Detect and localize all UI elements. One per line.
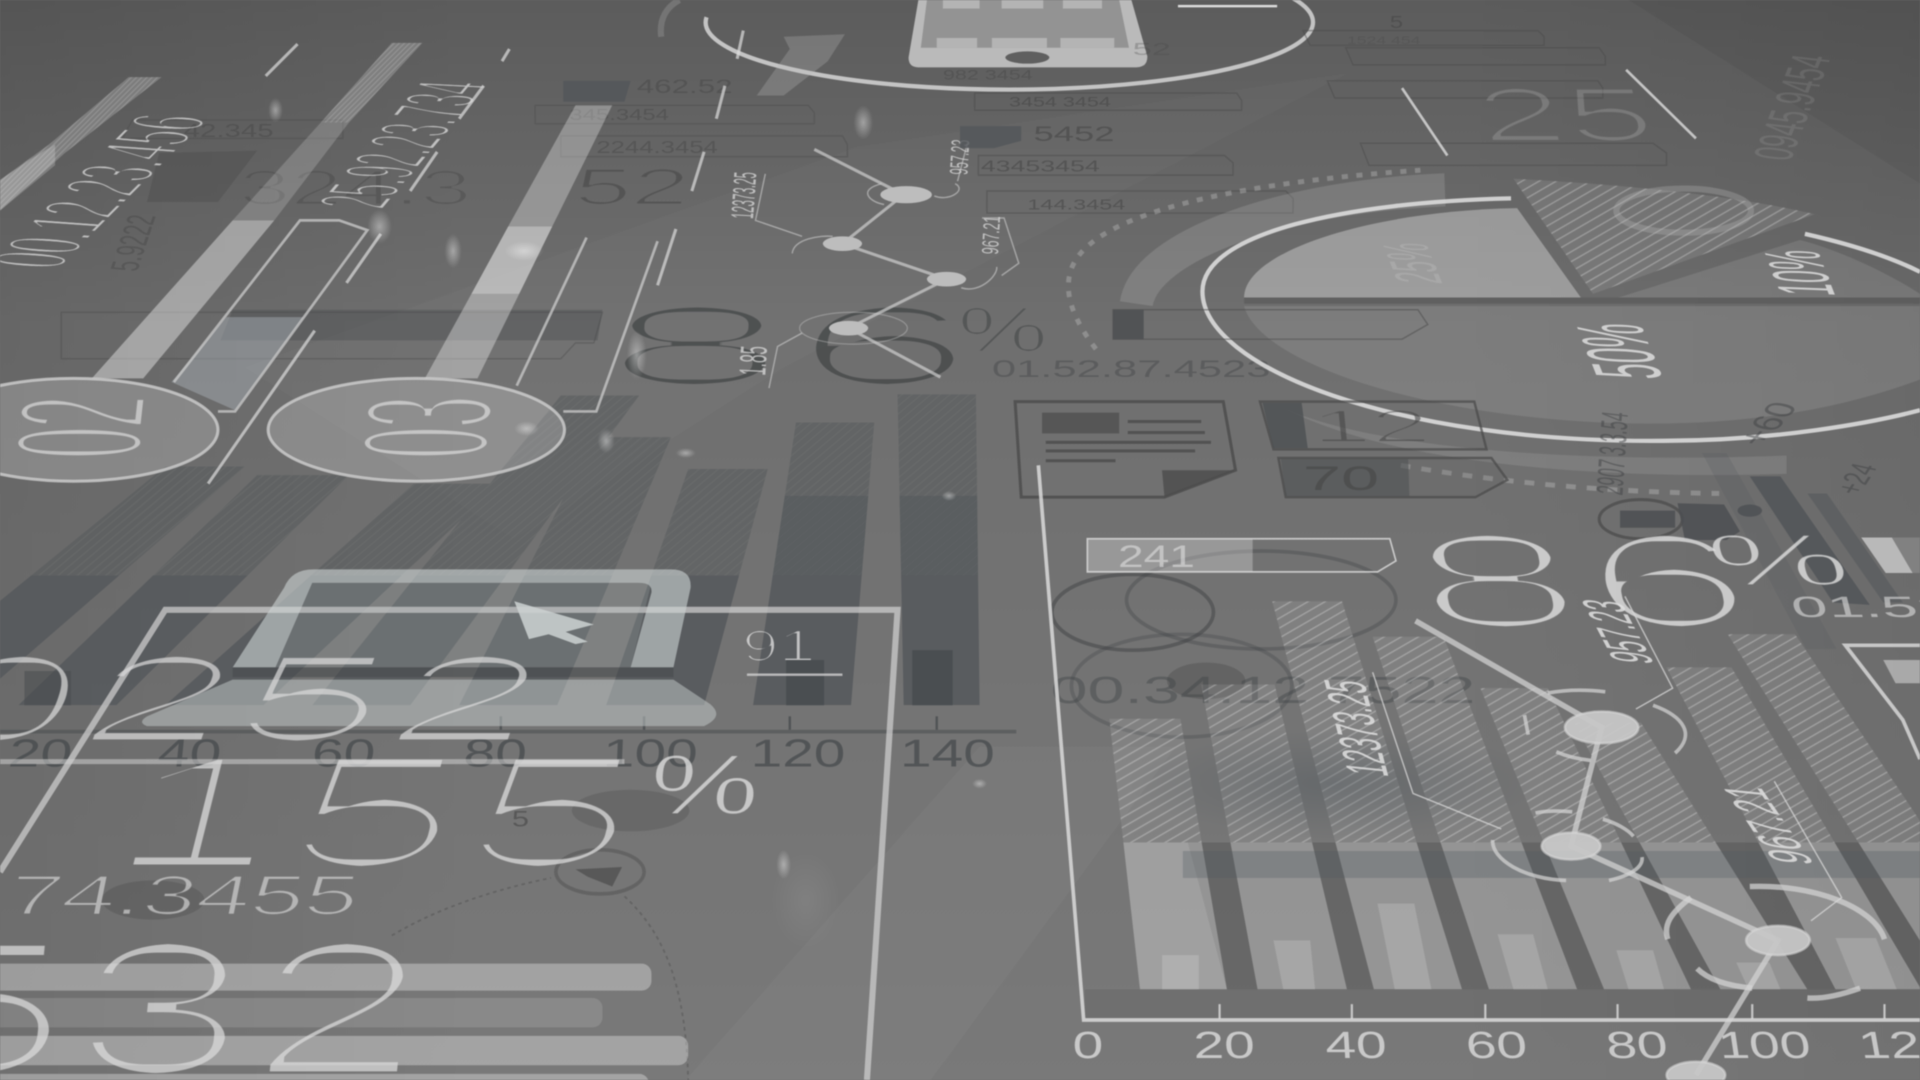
top data boxes: 1524 454 bbox=[1347, 35, 1420, 47]
number 91: 91 bbox=[742, 621, 816, 671]
bar 01 bbox=[0, 77, 162, 211]
faint big numerals top right: 25 bbox=[1468, 72, 1662, 157]
dark chart axis: 60 bbox=[310, 732, 377, 775]
faint lower-left icons: 5 bbox=[512, 807, 529, 831]
frame 02 bbox=[171, 220, 367, 411]
dark chart axis: 120 bbox=[751, 732, 845, 775]
labels: 12373.25 bbox=[1311, 677, 1402, 779]
box 241: 241 bbox=[1118, 539, 1195, 574]
top data boxes: 5452 bbox=[1033, 123, 1114, 146]
links bbox=[1416, 621, 1778, 1075]
labels bbox=[1311, 597, 1827, 867]
right top dark cluster: +60 bbox=[1728, 399, 1807, 449]
slice right bbox=[1619, 240, 1920, 298]
labels: 967.21 bbox=[1707, 782, 1827, 867]
axis labels bbox=[1073, 1024, 1920, 1067]
labels: 50% bbox=[1554, 321, 1683, 380]
lower band bbox=[1278, 405, 1787, 475]
mini node chart top centre: 967.21 bbox=[977, 215, 1005, 255]
faint dark data boxes, left: 2244.3454 bbox=[596, 137, 718, 157]
faint big numerals top right: 0945.9454 bbox=[1741, 52, 1842, 163]
percent sign: % bbox=[645, 737, 765, 833]
faint dark data boxes, left: 462.52 bbox=[637, 75, 733, 98]
main bar chart bbox=[1038, 465, 1920, 1067]
labels: 25% bbox=[1369, 241, 1457, 285]
magnifier bbox=[1616, 189, 1751, 233]
right top dark cluster: 2907 3.3.54 bbox=[1590, 410, 1637, 497]
big dark 86 percent bbox=[599, 283, 1271, 409]
box 70: 70 bbox=[1303, 459, 1379, 497]
faint dark numerals right bbox=[1051, 551, 1475, 737]
icon: laptop bbox=[142, 569, 716, 726]
top data boxes: 3454 3454 bbox=[1009, 95, 1111, 110]
dark chart axis: 20 bbox=[6, 732, 75, 775]
lower half bbox=[1244, 306, 1920, 424]
top data boxes: 982 3454 bbox=[943, 68, 1033, 83]
right top dark cluster bbox=[1590, 399, 1903, 649]
faint dark data boxes, left: 324.3 bbox=[239, 160, 472, 215]
axis labels: 40 bbox=[1324, 1024, 1388, 1067]
dark chart axis: 80 bbox=[462, 732, 528, 775]
faint big numerals top right bbox=[1468, 52, 1842, 163]
mini node chart top centre bbox=[725, 139, 1019, 388]
ring outline bbox=[1202, 198, 1920, 441]
big dark 86 percent: 86 bbox=[599, 283, 981, 409]
dark chart axis: 140 bbox=[900, 732, 995, 775]
mini node chart top centre: 957.23 bbox=[945, 139, 976, 175]
top data boxes: 144.3454 bbox=[1027, 197, 1125, 213]
right top dark cluster: +24 bbox=[1829, 460, 1886, 498]
frame 03 bbox=[517, 238, 658, 411]
circle 03: 03 bbox=[321, 397, 533, 458]
axis labels: 100 bbox=[1715, 1024, 1814, 1067]
labels bbox=[1369, 241, 1853, 380]
bokeh particles bbox=[268, 98, 987, 949]
blurred gears behind bars bbox=[1127, 729, 1543, 839]
node chart right bbox=[1311, 596, 1884, 1080]
chart shadow bbox=[1085, 842, 1920, 1019]
frame rectangle left bbox=[0, 610, 898, 1080]
top data boxes: 5 bbox=[1390, 13, 1403, 32]
mini node chart top centre: 12373.25 bbox=[725, 171, 764, 220]
box 12 bbox=[1260, 400, 1487, 452]
icon: document bbox=[1015, 402, 1236, 497]
top data boxes bbox=[943, 13, 1667, 213]
faint dark data boxes, left: 345.3454 bbox=[569, 107, 669, 124]
icon: phone bbox=[909, 0, 1147, 67]
box 241 bbox=[1087, 539, 1396, 574]
dotted arc bbox=[1068, 170, 1420, 349]
axis labels: 20 bbox=[1193, 1024, 1255, 1067]
circle 03 bbox=[268, 378, 564, 481]
dark chart axis bbox=[0, 716, 1016, 775]
faint dark data boxes, left: 52 bbox=[572, 158, 692, 216]
bar 03 bbox=[425, 105, 612, 378]
bar 02 bbox=[92, 43, 422, 378]
axis labels: 80 bbox=[1604, 1024, 1670, 1067]
ticks bbox=[1220, 1004, 1884, 1019]
slice light bbox=[1244, 208, 1581, 298]
top data boxes: 52 bbox=[1133, 39, 1171, 59]
big dark 86 percent: 01.52.87.4523 bbox=[992, 356, 1271, 383]
dark bar chart bbox=[0, 367, 992, 705]
icon: calculator bbox=[1599, 500, 1762, 540]
bottom light bars bbox=[0, 964, 688, 1080]
gauge ring bbox=[1136, 190, 1445, 304]
pie chart bbox=[1068, 170, 1920, 493]
faint dark data boxes, left: 5.9222 bbox=[102, 213, 165, 272]
number 86 percent light: 86 bbox=[1396, 507, 1768, 656]
mini node chart top centre: 1.85 bbox=[733, 345, 776, 376]
dark chart axis: 40 bbox=[156, 732, 223, 775]
axis labels: 0 bbox=[1073, 1024, 1103, 1067]
labels: 957.23 bbox=[1567, 597, 1667, 666]
axis labels: 60 bbox=[1464, 1024, 1529, 1067]
slice hatched bbox=[1513, 179, 1815, 294]
number 155: 155 bbox=[89, 723, 665, 901]
faint dark data boxes, left bbox=[61, 75, 847, 359]
bars bbox=[1102, 588, 1920, 989]
accent strokes bbox=[208, 31, 743, 484]
big dark 86 percent: % bbox=[958, 294, 1048, 366]
faint dark numerals right: 00.34.12 7522 bbox=[1051, 669, 1475, 711]
box gauge bbox=[1113, 310, 1428, 339]
inner bars bbox=[1162, 904, 1897, 989]
box 12: 12 bbox=[1308, 400, 1433, 452]
dark chart axis: 100 bbox=[602, 732, 699, 775]
number 74.3455: 74.3455 bbox=[2, 864, 365, 927]
circle 02 bbox=[0, 378, 218, 481]
faint dark data boxes, left: 42.345 bbox=[184, 121, 274, 142]
horizontal strip bbox=[1183, 851, 1920, 878]
axes bbox=[1038, 465, 1920, 1020]
accent lines top right bbox=[1402, 70, 1696, 156]
leaders bbox=[1373, 596, 1842, 921]
box 70 bbox=[1278, 458, 1507, 497]
arcs bbox=[1493, 690, 1884, 998]
corner box bottom right bbox=[1845, 538, 1920, 759]
labels: 10% bbox=[1748, 248, 1853, 297]
phone and ring bbox=[661, 0, 1313, 96]
top data boxes: 43453454 bbox=[981, 157, 1100, 175]
rotated number 2: 25.92.23.734 bbox=[296, 79, 511, 210]
number 91 bbox=[742, 621, 842, 676]
nodes bbox=[1542, 711, 1810, 1080]
divider bbox=[1244, 298, 1920, 304]
number 86 percent light: % bbox=[1698, 519, 1859, 601]
faint lower-left icons bbox=[102, 790, 689, 1080]
